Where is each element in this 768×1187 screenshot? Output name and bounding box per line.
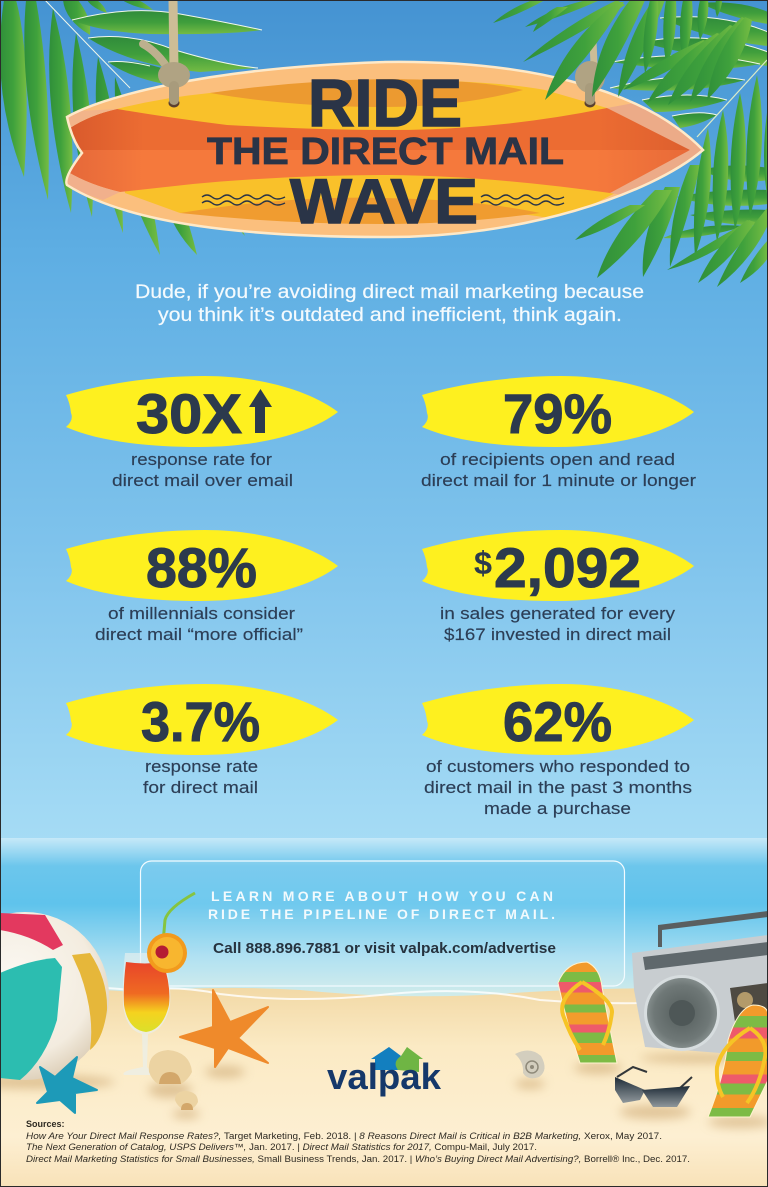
house green [396, 1047, 423, 1072]
left palm fronds [0, 0, 262, 255]
drink [124, 962, 169, 1032]
stat: 79% [421, 376, 696, 490]
stat: $2,092: in sales generated for every [440, 604, 676, 623]
title: WAVE [290, 167, 478, 237]
body [632, 935, 768, 1053]
stat: 30X: direct mail over email [112, 471, 293, 490]
call to action panel: RIDE THE PIPELINE OF DIRECT MAIL. [208, 906, 555, 922]
stat: 3.7%: for direct mail [143, 778, 258, 797]
intro text: you think it’s outdated and inefficient, think again. [158, 305, 622, 326]
stat: 79%: 79% [503, 382, 612, 445]
icon: scallop shell [149, 1050, 192, 1084]
surfboard sign [60, 0, 710, 237]
icon: spiral shell [515, 1050, 545, 1078]
stat: 62%: of customers who responded to [426, 757, 690, 776]
icon: small shell [175, 1091, 198, 1110]
orange slice [147, 933, 187, 973]
cassette [730, 983, 768, 1022]
stat: $2,092 [422, 530, 694, 644]
stat: 88%: of millennials consider [108, 604, 295, 623]
tip highlights [68, 109, 116, 128]
sources: Sources: [26, 1119, 65, 1129]
stat: 3.7%: 3.7% [141, 690, 260, 753]
right palm fronds behind board [575, 2, 768, 287]
title: THE DIRECT MAIL [207, 131, 564, 173]
right palm fronds in front of board [493, 0, 752, 105]
squiggle left [202, 195, 285, 205]
lower rib [697, 60, 767, 137]
glass [123, 953, 170, 1075]
stat: 62%: 62% [503, 690, 612, 753]
object shadows [0, 1053, 768, 1128]
sources: The Next Generation of Catalog, USPS Delivers™, Jan. 2017. | Direct Mail Statistics for 2017, Compu-Mail, July 2017. [26, 1142, 537, 1152]
intro text: Dude, if you’re avoiding direct mail marketing because [135, 282, 644, 303]
sources: How Are Your Direct Mail Response Rates?, Target Marketing, Feb. 2018. | 8 Reasons Direct Mail is Critical in B2B Marketing, Xerox, May 2017. [26, 1131, 662, 1141]
call to action panel: Call 888.896.7881 or visit valpak.com/advertise [213, 940, 556, 957]
icon: right flip flop [708, 1005, 768, 1117]
stat: 88%: 88% [146, 536, 257, 599]
arrow up [249, 389, 272, 433]
speaker [644, 975, 720, 1051]
row white edges [610, 17, 768, 116]
stat: 79%: of recipients open and read [440, 450, 675, 469]
sources: Direct Mail Marketing Statistics for Small Businesses, Small Business Trends, Jan. 2017. | Who’s Buying Direct Mail Advertising?, Borrell® Inc., Dec. 2017. [26, 1154, 690, 1164]
background: wave foam [0, 988, 768, 1003]
icon: left flip flop [558, 962, 617, 1063]
background: sea [0, 838, 768, 1003]
stat: 62%: made a purchase [484, 799, 631, 818]
board base [66, 62, 703, 237]
rope left [143, 0, 190, 108]
frond white edges [45, 0, 262, 88]
board colour bands [60, 79, 710, 224]
cherry [156, 946, 168, 958]
stat: 30X: 30X [136, 382, 242, 445]
house blue [371, 1047, 401, 1070]
rope right [575, 15, 605, 108]
stat: 3.7%: response rate [145, 757, 258, 776]
call to action panel [140, 861, 624, 986]
stat: 30X [66, 376, 338, 490]
squiggle right [481, 195, 564, 205]
stat: 88%: direct mail “more official” [95, 625, 303, 644]
icon: sunglasses [615, 1067, 692, 1107]
board rim highlight [66, 62, 703, 237]
sources [26, 1119, 690, 1164]
handle [658, 911, 768, 947]
stat: $2,092: 2,092 [494, 536, 641, 599]
background: sky [0, 0, 768, 845]
stat: 88% [66, 530, 338, 644]
logo: valpak: valpak [327, 1056, 442, 1097]
stat: 30X: response rate for [131, 450, 272, 469]
icon: beach ball [0, 912, 109, 1080]
icon: boombox [632, 911, 768, 1053]
stat: 79%: direct mail for 1 minute or longer [421, 471, 696, 490]
title: RIDE [308, 66, 462, 141]
title [207, 66, 564, 237]
stat: 62% [422, 684, 694, 818]
display strip [643, 942, 768, 970]
stat: 3.7% [66, 684, 338, 797]
icon: teal starfish [37, 1057, 97, 1113]
icon: orange starfish [180, 990, 268, 1067]
background: sand [0, 988, 768, 1187]
intro text [135, 282, 644, 326]
call to action panel: LEARN MORE ABOUT HOW YOU CAN [211, 888, 553, 904]
stat: $2,092: $167 invested in direct mail [444, 625, 671, 644]
icon: cocktail [123, 893, 195, 1075]
straw [163, 893, 195, 943]
stat: 62%: direct mail in the past 3 months [424, 778, 692, 797]
stat: $2,092: $ [474, 545, 492, 581]
